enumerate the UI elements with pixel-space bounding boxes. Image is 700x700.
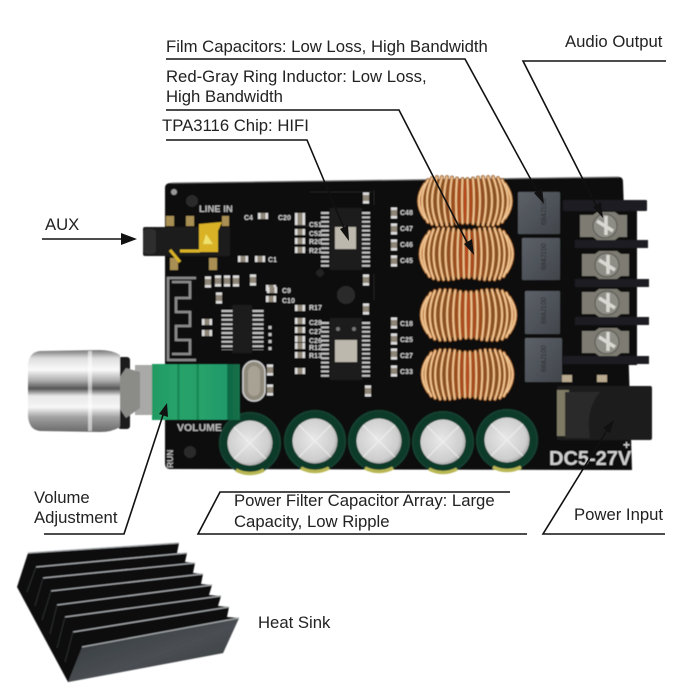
silkscreen labels: C51 xyxy=(309,222,322,229)
label: AUX xyxy=(42,215,137,245)
DC power jack xyxy=(557,375,652,440)
silkscreen labels: R20 xyxy=(309,239,322,246)
silkscreen labels: C27 xyxy=(400,353,413,360)
label: Power Filter Capacitor Array: Power Filter Capacitor Array: Large xyxy=(234,491,495,510)
label: Volume Adjustment xyxy=(34,403,168,534)
film capacitors: 684J100 xyxy=(541,297,548,324)
film capacitors: 684J100 xyxy=(541,198,548,225)
label: Film Capacitors xyxy=(166,37,544,204)
silkscreen labels xyxy=(165,204,413,468)
silkscreen labels: C10 xyxy=(282,298,295,305)
DC voltage marking xyxy=(549,438,632,470)
film capacitors: 684J100 xyxy=(541,345,548,372)
silkscreen labels: C33 xyxy=(400,369,413,376)
mounting holes and traces xyxy=(171,189,374,458)
audio input jack xyxy=(143,216,230,270)
DC voltage marking: + xyxy=(623,438,630,452)
label: Audio Output xyxy=(523,32,666,218)
silkscreen labels: C4 xyxy=(244,215,253,222)
label: Volume Adjustment: Volume xyxy=(34,488,90,507)
silkscreen labels: R17 xyxy=(309,305,322,312)
Bluetooth antenna xyxy=(168,278,196,360)
silkscreen labels: LINE IN xyxy=(199,204,233,215)
silkscreen labels: C28 xyxy=(309,320,322,327)
silkscreen labels: C9 xyxy=(282,288,291,295)
DC voltage marking: DC5-27V xyxy=(549,448,632,470)
silkscreen labels: C52 xyxy=(309,231,322,238)
label: Film Capacitors: Film Capacitors: Low Loss, High Bandwidth xyxy=(166,37,488,56)
silkscreen labels: C26 xyxy=(309,338,322,345)
chip: TPA3116 top xyxy=(325,208,366,270)
silkscreen labels: C47 xyxy=(400,226,413,233)
circuit board xyxy=(143,177,652,474)
silkscreen labels: C45 xyxy=(400,258,413,265)
silkscreen labels: R12 xyxy=(309,345,322,352)
silkscreen labels: C20 xyxy=(278,215,291,222)
filter capacitors xyxy=(219,409,538,474)
silkscreen labels: R13 xyxy=(309,353,322,360)
label: Inductor: Red-Gray Ring Inductor: Low Loss, xyxy=(166,67,427,86)
silkscreen labels: C48 xyxy=(400,210,413,217)
label: Power Input: Power Input xyxy=(574,505,663,524)
label: Inductor xyxy=(166,67,474,255)
label: TPA3116 Chip xyxy=(162,116,349,241)
label: Inductor: High Bandwidth xyxy=(166,87,283,106)
silkscreen labels: C27 xyxy=(309,329,322,336)
film capacitors: 684J100 xyxy=(541,243,548,270)
heat sink xyxy=(17,543,239,682)
chip: TPA3116 bottom xyxy=(325,318,366,380)
crystal oscillator xyxy=(243,361,265,401)
film capacitors xyxy=(518,192,562,382)
silkscreen labels: C18 xyxy=(400,321,413,328)
label: Power Filter Capacitor Array: Capacity, Low Ripple xyxy=(234,512,390,531)
label: Power Filter Capacitor Array xyxy=(198,491,527,534)
toroid inductors xyxy=(418,177,516,399)
label: Volume Adjustment: Adjustment xyxy=(34,508,118,527)
silkscreen labels: C25 xyxy=(400,337,413,344)
silkscreen labels: C46 xyxy=(400,242,413,249)
silkscreen labels: VOLUME xyxy=(177,422,222,434)
label: TPA3116 Chip: TPA3116 Chip: HIFI xyxy=(162,116,309,135)
silkscreen labels: C1 xyxy=(268,257,277,264)
label: Heat Sink: Heat Sink xyxy=(258,613,331,632)
label: Power Input xyxy=(543,420,665,534)
label: AUX: AUX xyxy=(45,215,79,234)
small components xyxy=(202,192,397,396)
silkscreen labels: RUN xyxy=(165,450,175,468)
output terminal block xyxy=(563,200,649,365)
chip: Bluetooth xyxy=(227,305,270,353)
volume potentiometer and knob xyxy=(28,350,240,432)
label: Audio Output: Audio Output xyxy=(565,32,663,51)
silkscreen labels: R21 xyxy=(309,248,322,255)
